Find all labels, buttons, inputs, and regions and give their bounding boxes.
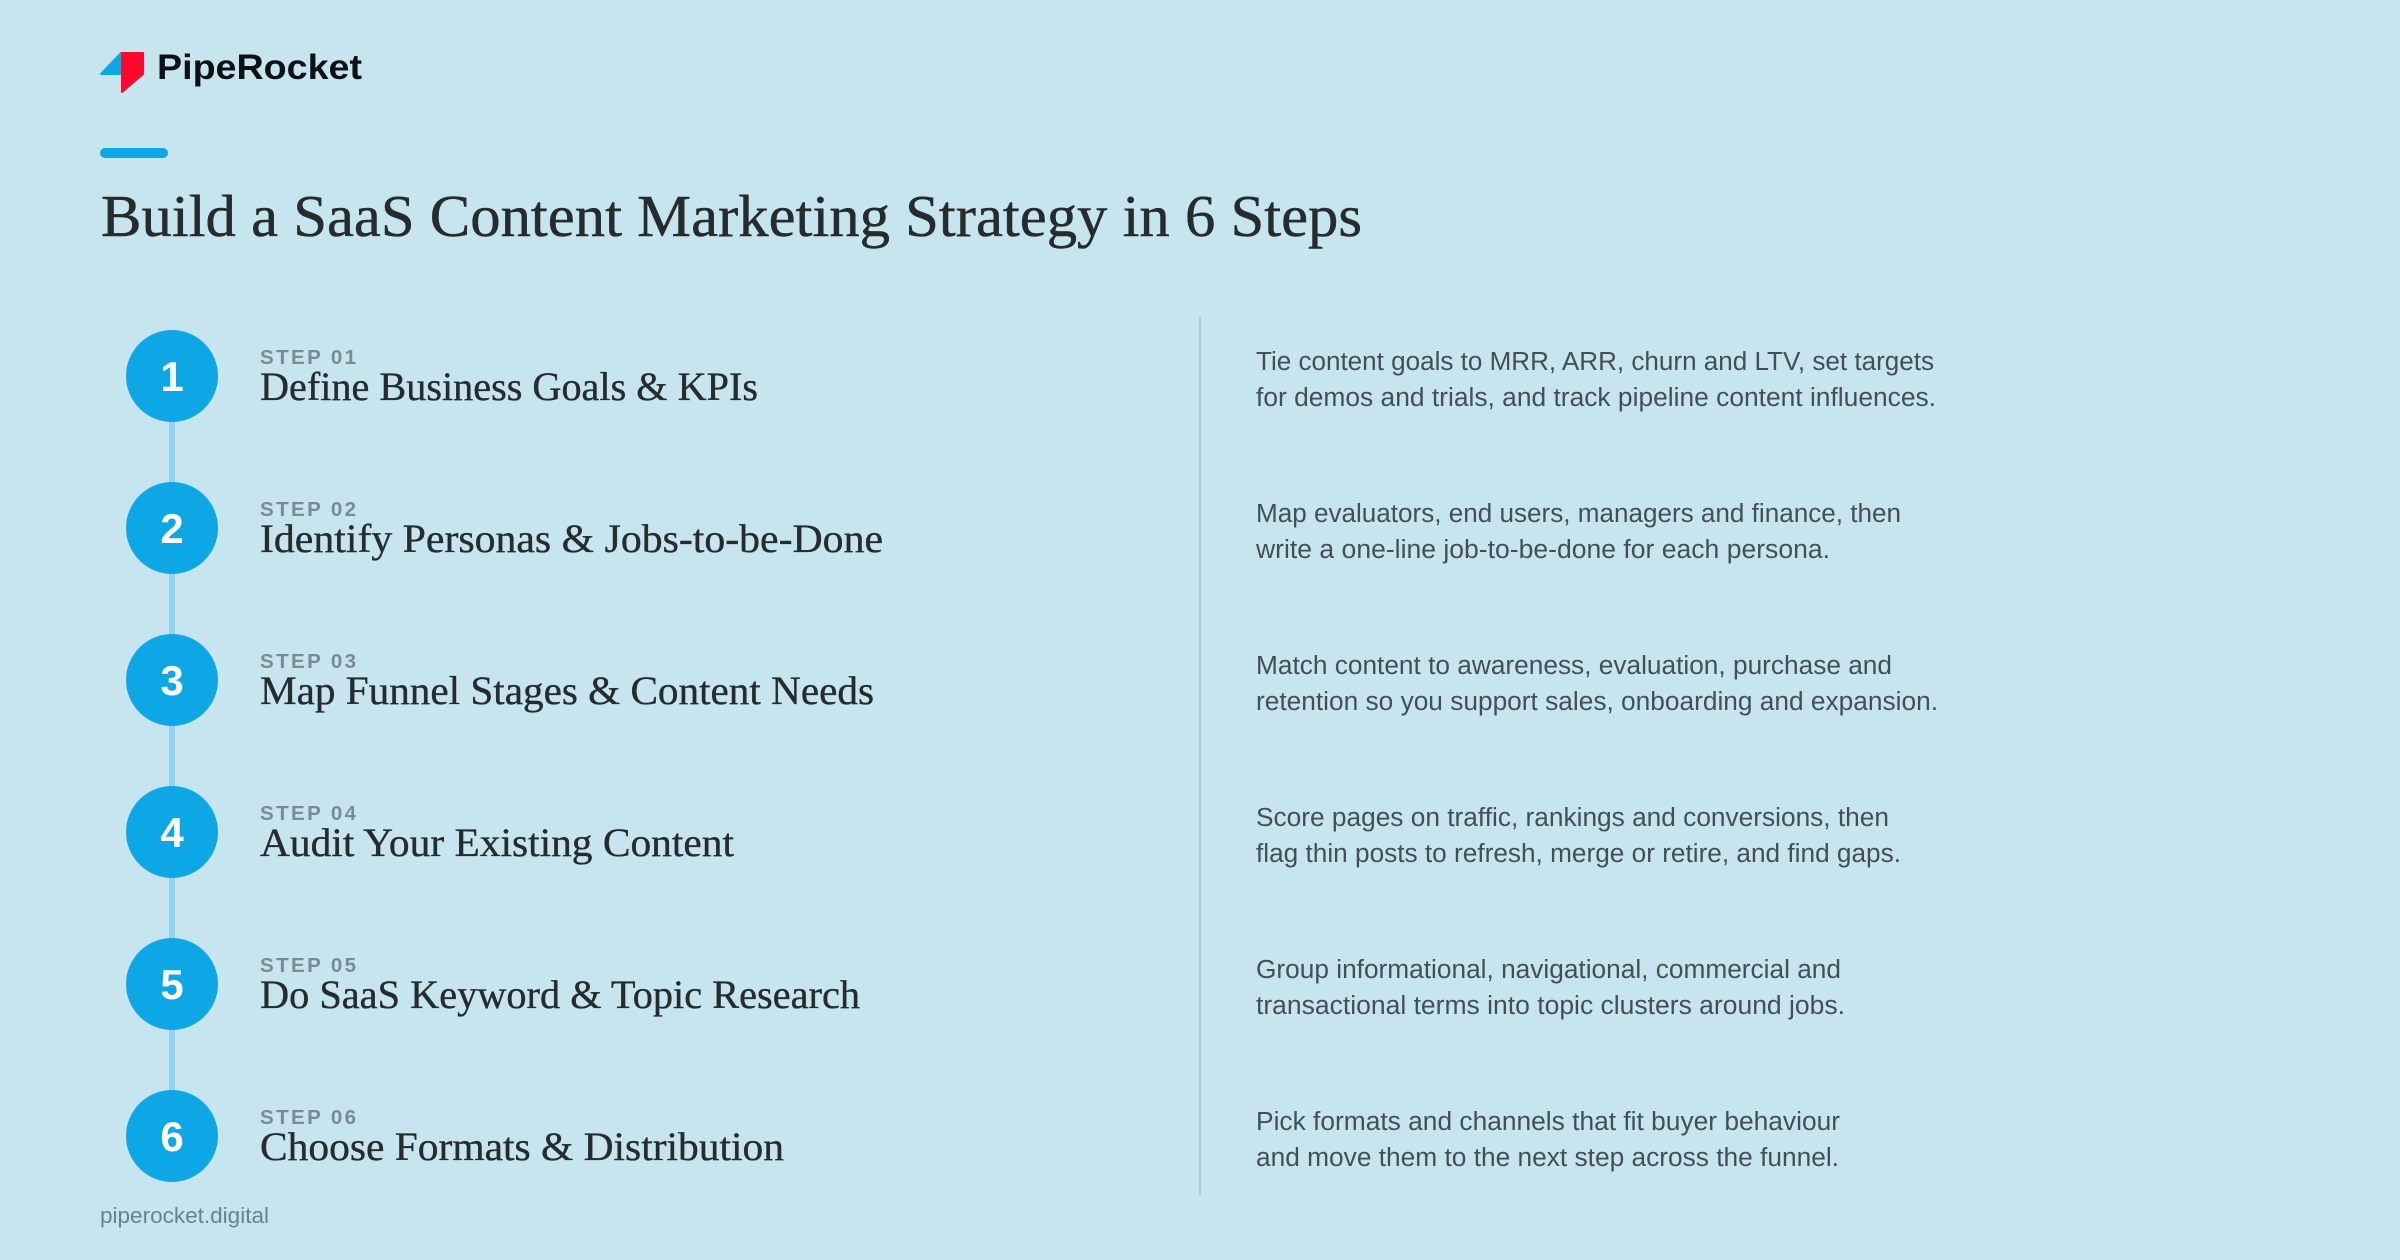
- step 3 label: STEP 03: [260, 650, 358, 673]
- step 1: [126, 330, 1936, 422]
- step 1 description: for demos and trials, and track pipeline content influences.: [1256, 384, 1936, 412]
- step 4 label: STEP 04: [260, 802, 358, 825]
- step 6 number badge: 6: [160, 1113, 184, 1160]
- step 3 description: Match content to awareness, evaluation, purchase and: [1256, 652, 1892, 680]
- step 6 heading: Choose Formats & Distribution: [260, 1124, 784, 1169]
- step 2 description: write a one-line job-to-be-done for each persona.: [1255, 536, 1830, 564]
- step 3: [126, 634, 1938, 726]
- step 4 description: [1256, 804, 1901, 868]
- step 2 number badge: 2: [160, 505, 184, 552]
- step 5 description: [1256, 956, 1845, 1020]
- step 3 number badge: 3: [160, 657, 184, 704]
- step 6 number badge: [126, 1090, 218, 1182]
- step 3 number badge: [126, 634, 218, 726]
- step 5 description: Group informational, navigational, commercial and: [1256, 956, 1841, 984]
- step 4 heading: Audit Your Existing Content: [260, 820, 734, 865]
- step 4 description: Score pages on traffic, rankings and conversions, then: [1256, 804, 1889, 832]
- step 4 number badge: [126, 786, 218, 878]
- timeline connectors: [169, 420, 175, 1092]
- step 4 number badge: 4: [160, 809, 184, 856]
- title: Build a SaaS Content Marketing Strategy in 6 Steps: [101, 183, 1362, 249]
- step 5 number badge: 5: [160, 961, 184, 1008]
- step 1 number badge: 1: [160, 353, 184, 400]
- step 2 number badge: [126, 482, 218, 574]
- step 1 number badge: [126, 330, 218, 422]
- step 6: [126, 1090, 1841, 1182]
- step 2 description: [1255, 500, 1901, 564]
- logo: PipeRocket: [101, 48, 362, 92]
- step 3 heading: Map Funnel Stages & Content Needs: [260, 668, 874, 713]
- step 4 description: flag thin posts to refresh, merge or retire, and find gaps.: [1256, 840, 1901, 868]
- icon: rocket mark: [101, 53, 143, 92]
- logo wordmark: PipeRocket: [157, 48, 362, 87]
- step 5 heading: Do SaaS Keyword & Topic Research: [260, 972, 860, 1017]
- footer url: piperocket.digital: [100, 1203, 269, 1228]
- step 2 description: Map evaluators, end users, managers and finance, then: [1256, 500, 1901, 528]
- step 1 heading: Define Business Goals & KPIs: [260, 364, 758, 409]
- step 3 description: [1256, 652, 1938, 716]
- accent bar: [100, 148, 168, 158]
- step 2 heading: Identify Personas & Jobs-to-be-Done: [260, 516, 883, 561]
- step 3 description: retention so you support sales, onboarding and expansion.: [1256, 688, 1938, 716]
- step 5: [126, 938, 1845, 1030]
- step 5 label: STEP 05: [260, 954, 358, 977]
- column divider: [1199, 316, 1201, 1196]
- step 5 number badge: [126, 938, 218, 1030]
- step 6 description: and move them to the next step across the funnel.: [1256, 1144, 1839, 1172]
- step 6 label: STEP 06: [260, 1106, 358, 1129]
- step 6 description: [1256, 1108, 1841, 1172]
- step 1 description: Tie content goals to MRR, ARR, churn and LTV, set targets: [1256, 348, 1934, 376]
- step 5 description: transactional terms into topic clusters around jobs.: [1256, 992, 1845, 1020]
- step 1 label: STEP 01: [260, 346, 358, 369]
- step 2 label: STEP 02: [260, 498, 358, 521]
- step 6 description: Pick formats and channels that fit buyer behaviour: [1256, 1108, 1841, 1136]
- step 2: [126, 482, 1901, 574]
- step 4: [126, 786, 1901, 878]
- step 1 description: [1256, 348, 1936, 412]
